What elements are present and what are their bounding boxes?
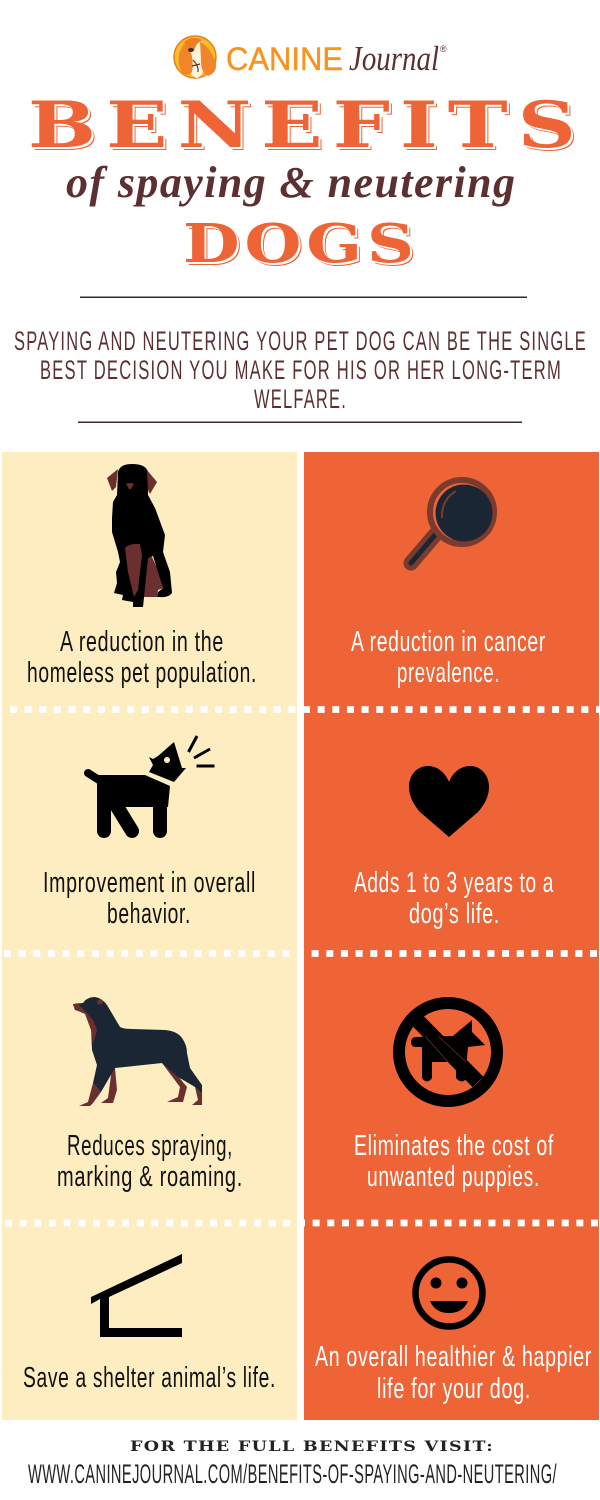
title: Dogs: DOGS bbox=[186, 215, 422, 278]
subtitle: of spaying and neutering: of spaying & neutering bbox=[66, 158, 515, 207]
caption bbox=[354, 1130, 554, 1193]
title: Benefits: BENEFITS bbox=[31, 91, 589, 166]
caption: Improvement in overall bbox=[43, 867, 256, 899]
caption bbox=[43, 867, 256, 930]
title: Dogs: DOGS bbox=[183, 212, 419, 275]
caption: Reduces spraying, bbox=[67, 1130, 233, 1162]
icon: basset hound head bbox=[174, 36, 216, 78]
registered mark: ® bbox=[440, 44, 447, 54]
title: Dogs: DOGS bbox=[185, 214, 421, 277]
caption: dog’s life. bbox=[409, 898, 500, 930]
panel: healthier and happier bbox=[304, 1222, 599, 1420]
panel: overall behavior bbox=[2, 709, 297, 953]
icon: sitting dog bbox=[107, 464, 172, 607]
panel: cost of puppies bbox=[304, 953, 599, 1222]
icon: heart bbox=[409, 766, 489, 837]
intro text bbox=[14, 326, 587, 414]
caption bbox=[315, 1341, 592, 1405]
caption: Save a shelter animal’s life. bbox=[23, 1362, 276, 1394]
panel: homeless pet population bbox=[2, 452, 297, 709]
caption bbox=[27, 626, 257, 689]
title: Benefits: BENEFITS bbox=[28, 88, 586, 163]
wordmark: Canine: CANINE bbox=[226, 41, 343, 77]
caption: life for your dog. bbox=[377, 1373, 531, 1405]
caption: behavior. bbox=[107, 898, 191, 930]
caption bbox=[57, 1130, 243, 1193]
panel: shelter animal bbox=[2, 1222, 297, 1420]
panel: spraying and roaming bbox=[2, 953, 297, 1222]
caption: homeless pet population. bbox=[27, 657, 257, 689]
icon: no dogs sign bbox=[399, 1003, 497, 1101]
title: Benefits: BENEFITS bbox=[30, 90, 588, 165]
caption: A reduction in the bbox=[60, 626, 224, 658]
wordmark: Journal: Journal bbox=[349, 39, 439, 78]
logo: Canine Journal bbox=[174, 36, 447, 78]
icon: magnifying glass bbox=[411, 480, 494, 563]
footer heading: FOR THE FULL BENEFITS VISIT: bbox=[130, 1439, 494, 1455]
icon: smiley face bbox=[416, 1260, 482, 1326]
caption: prevalence. bbox=[397, 657, 500, 689]
caption: marking & roaming. bbox=[57, 1161, 243, 1193]
intro text: WELFARE. bbox=[254, 384, 347, 414]
panel: adds years bbox=[304, 709, 599, 953]
caption bbox=[351, 626, 546, 689]
caption bbox=[354, 867, 554, 930]
icon: dog house bbox=[91, 1254, 182, 1337]
icon: standing dog bbox=[73, 997, 202, 1106]
icon: barking dog bbox=[88, 736, 214, 831]
panel: cancer prevalence bbox=[304, 452, 599, 709]
